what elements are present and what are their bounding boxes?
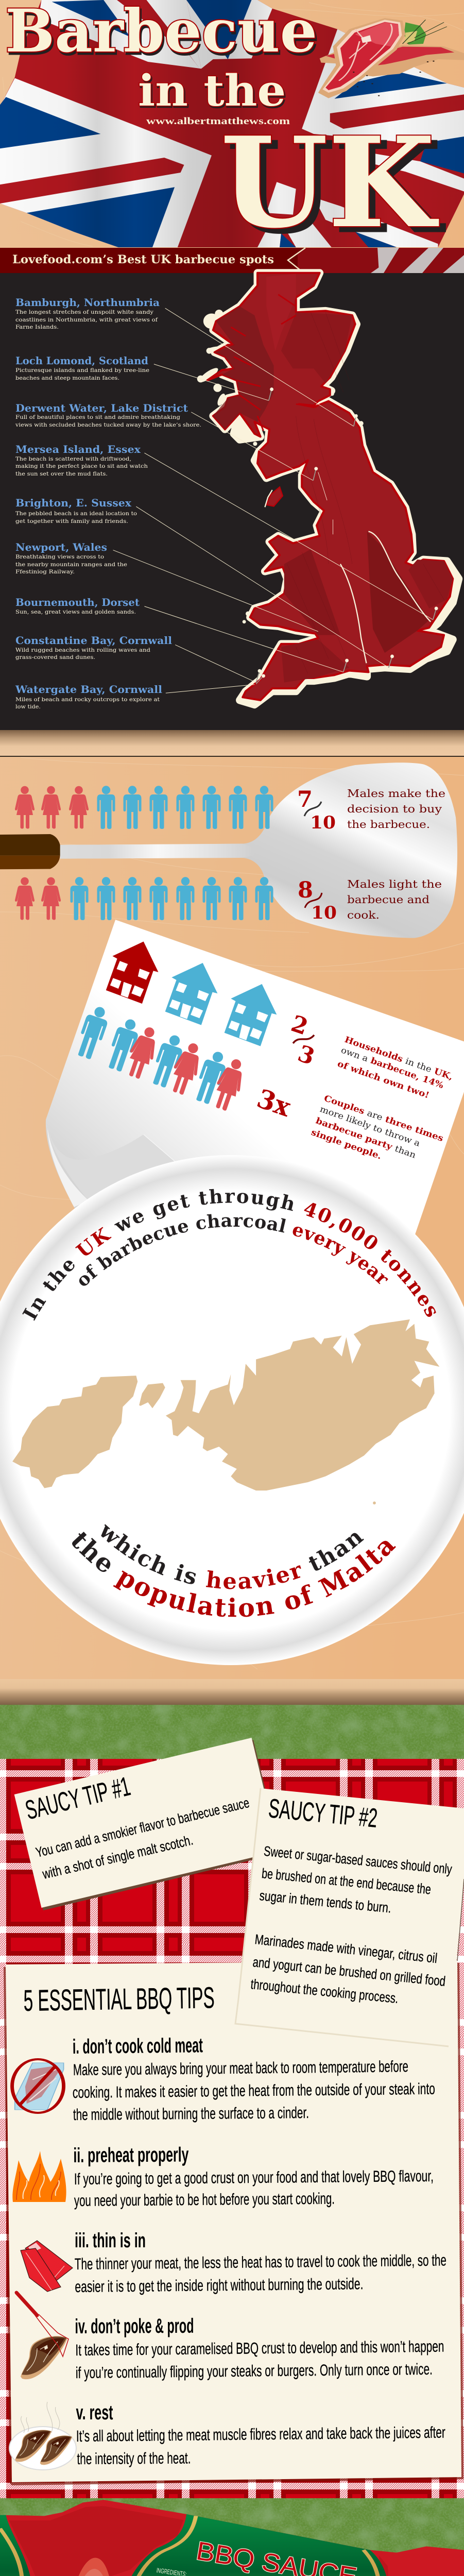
text: couples: barbecue party than xyxy=(315,1115,418,1160)
note: saucy tip 2: SAUCY TIP #2 xyxy=(267,1793,379,1834)
lines of the steak grain xyxy=(287,312,444,673)
arc for curved text 2 xyxy=(83,1227,384,1288)
text: couples: more likely to throw a xyxy=(319,1104,422,1148)
leader lines xyxy=(113,308,433,693)
website url: www.albertmatthews.com xyxy=(146,116,290,127)
text: Bournemouth description: Sun, sea, great views and golden sands. xyxy=(15,609,136,615)
text: Watergate Bay: Watergate Bay, Cornwall xyxy=(15,684,162,696)
text: males light the barbecue xyxy=(347,878,442,921)
note: saucy tip 2: throughout the cooking process. xyxy=(250,1976,399,2006)
cream sandy coastline xyxy=(213,273,459,705)
panel: BBQ sauce bottle with sources xyxy=(0,2500,464,2576)
text: couples: Couples are three times xyxy=(323,1093,445,1143)
text: Brighton: Brighton, E. Sussex xyxy=(15,497,131,509)
curved text: 40,000 tonnes: In the UK we get through 40,000 tonnes xyxy=(22,1189,436,1321)
title: in the: in the xyxy=(138,65,286,116)
tip i: the middle without burning the surface to a cinder. xyxy=(73,2104,309,2124)
people row: 7 of 10 males buy xyxy=(15,786,273,829)
text: Brighton description xyxy=(15,511,137,524)
location pins xyxy=(256,387,438,684)
text: Bamburgh description xyxy=(15,309,158,330)
note: saucy tip 1: with a shot of single malt scotch. xyxy=(41,1832,195,1882)
fraction 7/10: 10 xyxy=(310,812,336,833)
icon: spatula xyxy=(0,762,457,938)
panel: plate with Malta comparison xyxy=(0,1155,464,1665)
tip iv: iv. don’t poke & prod xyxy=(75,2315,194,2338)
text: Watergate Bay description xyxy=(15,697,160,710)
arc for curved text 1 xyxy=(34,1203,430,1321)
curved text: heavier: which is heavier than xyxy=(101,1524,364,1589)
curved text: charcoal every year: of barbecue charcoal every year xyxy=(79,1214,388,1286)
text: males make the decision: Males make the xyxy=(347,787,445,800)
text: Mersea Island description: The beach is scattered with driftwood, xyxy=(15,456,131,462)
text: couples xyxy=(310,1093,445,1161)
text: Bamburgh: Bamburgh, Northumbria xyxy=(15,297,160,309)
text: males make the decision: decision to buy xyxy=(347,803,442,815)
text: Brighton description: The pebbled beach is an ideal location to xyxy=(15,511,137,517)
text: Newport description: Ffestiniog Railway. xyxy=(15,569,75,575)
icon: red house xyxy=(106,942,158,1004)
text: Watergate Bay description: Miles of beach and rocky outcrops to explore at xyxy=(15,697,160,703)
text: Mersea Island description xyxy=(15,456,148,477)
grass background top xyxy=(0,1705,464,1759)
banner: best UK barbecue spots xyxy=(0,248,464,273)
map of Malta xyxy=(12,1319,439,1504)
text: Loch Lomond description: Picturesque islands and flanked by tree-line xyxy=(15,367,149,374)
wooden shelf trim xyxy=(0,730,464,756)
text: Bamburgh description: coastlines in Northumbria, with great views of xyxy=(15,317,158,323)
text: households: own a barbecue, 14% xyxy=(340,1045,445,1090)
tip ii: ii. preheat properly xyxy=(73,2143,189,2167)
fraction 2/3: 3 xyxy=(295,1040,318,1071)
people row: 8 of 10 males light xyxy=(15,877,273,920)
panel: 5 essential BBQ tips xyxy=(4,1961,463,2485)
tip iv xyxy=(16,2293,444,2382)
header: Barbecue in the UK xyxy=(0,0,464,261)
note: saucy tip 1: SAUCY TIP #1 xyxy=(23,1771,133,1825)
text: Loch Lomond description xyxy=(15,367,149,381)
panel: map of best barbecue spots xyxy=(0,273,464,730)
fraction 8/10: 8 xyxy=(298,877,313,903)
title: Barbecue: Barbecue xyxy=(7,0,319,68)
text: males light the barbecue: barbecue and xyxy=(347,893,429,906)
wooden trim xyxy=(0,1679,464,1705)
tip v: the intensity of the heat. xyxy=(77,2449,191,2468)
text: Mersea Island description: making it the perfect place to sit and watch xyxy=(15,463,148,469)
text: Newport description: the nearby mountain ranges and the xyxy=(15,562,127,568)
text: Newport: Newport, Wales xyxy=(15,541,107,553)
text: Bamburgh description: Farne Islands. xyxy=(15,324,59,330)
icon: steaks with herbs xyxy=(318,18,464,98)
note: saucy tip 2 xyxy=(235,1788,464,2046)
tip i: i. don’t cook cold meat xyxy=(73,2034,203,2058)
fraction 7/10 xyxy=(297,787,336,833)
text: households: Households in the UK, xyxy=(343,1035,454,1082)
fraction 2/3 xyxy=(288,1010,318,1071)
tips paper xyxy=(6,1961,461,2482)
flag: union jack xyxy=(0,0,464,247)
fraction 2/3: 2 xyxy=(288,1010,311,1041)
tip v xyxy=(9,2401,445,2470)
text: Mersea Island description: the sun set over the mud flats. xyxy=(15,471,108,477)
text: Bournemouth: Bournemouth, Dorset xyxy=(15,597,140,608)
cream fat veins xyxy=(318,472,431,663)
tip v: v. rest xyxy=(76,2401,113,2424)
text: males make the decision: the barbecue. xyxy=(347,818,430,831)
heading: 5 essential BBQ tips: 5 ESSENTIAL BBQ TIPS xyxy=(23,1981,215,2018)
cream islands xyxy=(197,310,364,681)
icon: tongs on steak xyxy=(16,2293,68,2379)
note: saucy tip 1: You can add a smokier flavor to barbecue sauce xyxy=(34,1795,251,1860)
bottle xyxy=(0,2500,464,2576)
grass background bottom xyxy=(0,2498,464,2576)
wood grain in header xyxy=(0,3,464,246)
text: Brighton description: get together with family and friends. xyxy=(15,518,128,524)
text: Bamburgh description: The longest stretches of unspoilt white sandy xyxy=(15,309,153,315)
text: Constantine Bay description: Wild rugged beaches with rolling waves and xyxy=(15,647,150,653)
tip iii: iii. thin is in xyxy=(75,2229,146,2252)
isle of man xyxy=(266,487,283,506)
paper sheet xyxy=(46,920,464,1236)
icon: steaks resting on plate xyxy=(9,2402,76,2470)
map of the UK as a steak xyxy=(113,273,459,705)
text: Constantine Bay description xyxy=(15,647,150,660)
text: Mersea Island: Mersea Island, Essex xyxy=(15,444,141,455)
text: Newport description xyxy=(15,554,127,575)
arc for curved text 4 xyxy=(70,1541,398,1617)
fraction 8/10: 10 xyxy=(311,903,337,923)
text: households xyxy=(336,1035,454,1100)
bottle highlights xyxy=(64,2557,117,2576)
note: saucy tip 2: sugar in them tends to burn. xyxy=(259,1888,392,1916)
tip ii: you need your barbie to be hot before you start cooking. xyxy=(74,2190,335,2210)
title: in the: in the xyxy=(139,67,287,117)
text: Derwent Water description xyxy=(15,414,201,428)
icon: blue house xyxy=(165,963,217,1025)
note: saucy tip 1 xyxy=(14,1738,281,1910)
text: Loch Lomond: Loch Lomond, Scotland xyxy=(15,355,148,367)
text: Constantine Bay description: grass-covered sand dunes. xyxy=(15,654,95,660)
panel shadow xyxy=(4,1963,463,2485)
text: couples: single people. xyxy=(310,1127,383,1161)
text: Constantine Bay: Constantine Bay, Cornwall xyxy=(15,635,172,647)
text: males make the decision xyxy=(347,787,445,831)
icon: no cold meat xyxy=(12,2059,64,2113)
arc for curved text 3 xyxy=(98,1533,366,1589)
curved text: population of Malta: the population of Malta xyxy=(72,1532,396,1617)
title: UK: UK xyxy=(220,110,439,256)
fraction 8/10 xyxy=(298,877,337,923)
text: households: of which own two! xyxy=(336,1059,431,1100)
text: Newport description: Breathtaking views across to xyxy=(15,554,104,560)
text: Derwent Water description: Full of beautiful places to sit and admire breathtaking xyxy=(15,414,180,420)
tip iii xyxy=(21,2229,446,2296)
fraction 7/10: 7 xyxy=(297,787,313,812)
text: Derwent Water description: views with secluded beaches tucked away by the lake’s shore. xyxy=(15,422,201,428)
people: couples and single xyxy=(74,1004,249,1113)
plate xyxy=(0,1155,464,1665)
icon: blue house xyxy=(225,984,277,1046)
tip i xyxy=(12,2034,435,2124)
panel: paper with household stats xyxy=(46,920,464,1236)
text: Watergate Bay description: low tide. xyxy=(15,704,41,710)
dark inlets along the western coast xyxy=(231,295,317,431)
banner: best UK barbecue spots: Lovefood.com’s Best UK barbecue spots xyxy=(12,253,274,266)
tip ii xyxy=(12,2143,434,2210)
icon: flames xyxy=(12,2151,66,2202)
red steak body xyxy=(207,273,453,700)
darker steak shading xyxy=(213,307,274,429)
icon: herbs xyxy=(403,20,447,45)
multiplier 3x: 3x xyxy=(253,1083,295,1123)
tablecloth xyxy=(0,1759,464,2498)
page background: wood xyxy=(0,0,464,1705)
text: Loch Lomond description: beaches and steep mountain faces. xyxy=(15,375,119,381)
text: males light the barbecue: Males light the xyxy=(347,878,442,890)
text: Derwent Water: Derwent Water, Lake District xyxy=(15,402,188,414)
title: UK: UK xyxy=(227,115,445,261)
bottle label xyxy=(120,2514,389,2576)
text: males light the barbecue: cook. xyxy=(347,909,380,921)
icon: thin meat strips xyxy=(21,2241,73,2292)
panel: spatula statistics xyxy=(0,762,457,938)
